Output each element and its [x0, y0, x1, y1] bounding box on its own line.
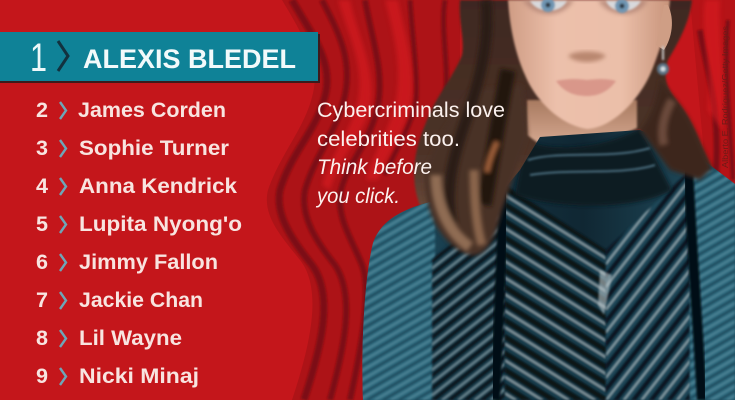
hair back: [414, 0, 712, 255]
warning message: celebrities too.: [317, 128, 460, 151]
top ranked banner: [0, 32, 320, 83]
rank 5: Lupita Nyong'o: [79, 213, 242, 236]
rank 8: 8: [36, 327, 48, 350]
right hair over dress: [640, 78, 712, 180]
rank 2: 2: [36, 99, 48, 122]
lips: [556, 79, 616, 96]
rank 9: 9: [36, 365, 48, 388]
warning message: [315, 99, 505, 208]
portrait photo: [355, 0, 735, 400]
right eye: [606, 0, 641, 13]
rank 2: James Corden: [78, 99, 226, 122]
dress: [355, 125, 735, 400]
dark vertical seams: [495, 190, 504, 400]
name: ALEXIS BLEDEL: [83, 44, 296, 74]
ear: [656, 5, 672, 50]
rank 9: Nicki Minaj: [79, 365, 199, 388]
eye shadows: [522, 0, 648, 14]
earring: [657, 46, 669, 75]
hair shading: [436, 0, 672, 247]
face: [508, 0, 670, 129]
rank 1: 1: [30, 36, 47, 80]
left eye: [530, 0, 567, 12]
rank 6: 6: [36, 251, 48, 274]
warning message: Think before: [317, 156, 432, 179]
left hair over dress: [425, 85, 528, 255]
warning message: Cybercriminals love: [317, 99, 505, 122]
ranking list: [36, 99, 242, 388]
photo credit: Alberto E. Rodriguez/Getty Images: [720, 26, 730, 168]
rank 7: Jackie Chan: [79, 289, 203, 312]
light blotch at chevron tip: [598, 270, 612, 315]
nose: [568, 52, 606, 62]
chevron: [58, 41, 68, 71]
rank 8: Lil Wayne: [79, 327, 182, 350]
rank 8: [36, 327, 182, 350]
rank 7: 7: [36, 289, 48, 312]
rank 3: Sophie Turner: [79, 137, 229, 160]
rank 9: [36, 365, 199, 388]
rank 3: 3: [36, 137, 48, 160]
rank 4: Anna Kendrick: [79, 175, 237, 198]
rank 4: 4: [36, 175, 48, 198]
warning message: you click.: [315, 185, 400, 208]
rank 5: 5: [36, 213, 48, 236]
collar: [515, 128, 672, 206]
rank 6: Jimmy Fallon: [79, 251, 218, 274]
neck: [527, 100, 637, 148]
